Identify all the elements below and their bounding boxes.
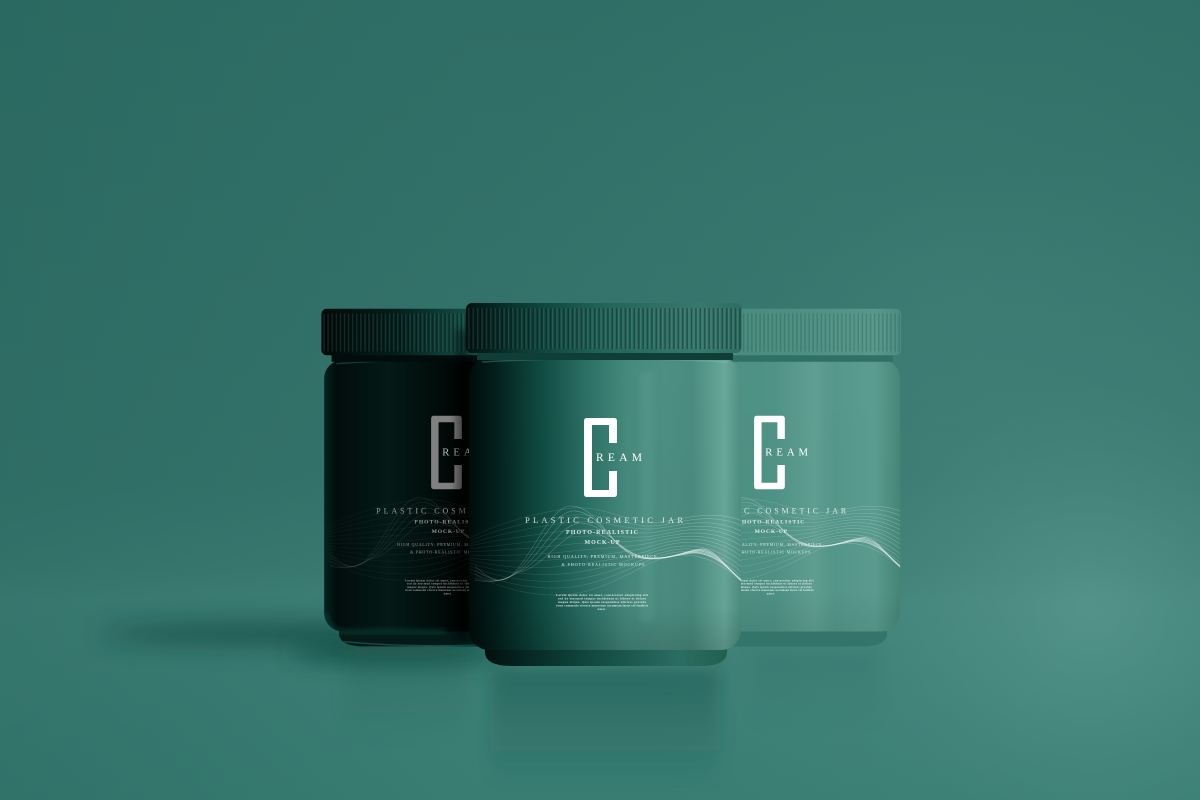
jar neck xyxy=(655,354,893,362)
product text: MOCK-UP xyxy=(584,540,620,546)
product text: PHOTO-REALISTIC xyxy=(566,530,638,536)
product text: risus commodo viverra maecenas accumsan lacus vel facilisis xyxy=(556,604,649,608)
product text: sed do eiusmod tempor incididunt ut labore et dolore xyxy=(558,596,647,600)
product text: amet. xyxy=(598,607,607,611)
logo: REAM: REAM xyxy=(442,447,486,459)
product text: MOCK-UP xyxy=(432,529,465,535)
product text: PHOTO-REALISTIC xyxy=(737,520,804,526)
floor shadow and reflections xyxy=(100,622,880,788)
jar base xyxy=(662,622,887,646)
product text: & PHOTO-REALISTIC MOCKUPS xyxy=(733,550,810,554)
jar base xyxy=(339,622,564,646)
product text: HIGH QUALITY, PREMIUM, MASTERPIECE xyxy=(720,543,822,548)
jar base xyxy=(485,640,727,666)
product text: PLASTIC COSMETIC JAR xyxy=(525,515,683,525)
product text xyxy=(376,506,524,595)
wave graphic xyxy=(648,498,904,580)
jar: left (in shadow) xyxy=(321,309,581,646)
product text xyxy=(525,515,683,611)
wave graphic xyxy=(325,498,581,580)
product text: magna aliqua. Quis ipsum suspendisse ultrices gravida xyxy=(730,585,812,589)
jar lid xyxy=(466,303,742,353)
product text: HIGH QUALITY, PREMIUM, MASTERPIECE xyxy=(397,543,499,548)
jar body xyxy=(469,358,741,650)
product text: PLASTIC COSMETIC JAR xyxy=(699,506,847,515)
jar body xyxy=(324,360,577,632)
product text xyxy=(699,506,847,595)
product text: magna aliqua. Quis ipsum suspendisse ultrices gravida xyxy=(407,585,489,589)
jar body xyxy=(647,360,900,632)
product text: HIGH QUALITY, PREMIUM, MASTERPIECE xyxy=(548,554,657,560)
logo: REAM: REAM xyxy=(765,447,809,459)
product text: amet. xyxy=(444,591,452,595)
product text: magna aliqua. Quis ipsum suspendisse ultrices gravida xyxy=(558,600,646,604)
jar: right (lit) xyxy=(644,309,904,646)
jar neck xyxy=(477,352,733,360)
jar neck xyxy=(332,354,570,362)
product text: PLASTIC COSMETIC JAR xyxy=(376,506,524,515)
product text: Lorem ipsum dolor sit amet, consectetur adipiscing elit xyxy=(405,578,491,582)
product text: MOCK-UP xyxy=(755,529,788,535)
product text: sed do eiusmod tempor incididunt ut labore et dolore xyxy=(730,582,812,586)
product text: PHOTO-REALISTIC xyxy=(414,520,481,526)
jar lid xyxy=(644,309,901,355)
logo: REAM: REAM xyxy=(596,452,642,464)
product text: & PHOTO-REALISTIC MOCKUPS xyxy=(410,550,487,554)
jar: centre xyxy=(466,303,745,666)
product text: & PHOTO-REALISTIC MOCKUPS xyxy=(562,562,645,567)
product text: amet. xyxy=(767,591,775,595)
product text: risus commodo viverra maecenas accumsan lacus vel facilisis xyxy=(728,588,814,592)
shadow cast by centre jar xyxy=(456,330,468,640)
wave graphic xyxy=(470,506,745,595)
product text: Lorem ipsum dolor sit amet, consectetur adipiscing elit xyxy=(556,593,649,597)
logo: C xyxy=(754,416,785,489)
jar lid xyxy=(321,309,578,355)
product text: Lorem ipsum dolor sit amet, consectetur adipiscing elit xyxy=(728,578,814,582)
logo: C xyxy=(431,416,462,489)
logo: C xyxy=(584,418,617,497)
product text: risus commodo viverra maecenas accumsan lacus vel facilisis xyxy=(405,588,491,592)
product text: sed do eiusmod tempor incididunt ut labore et dolore xyxy=(407,582,489,586)
